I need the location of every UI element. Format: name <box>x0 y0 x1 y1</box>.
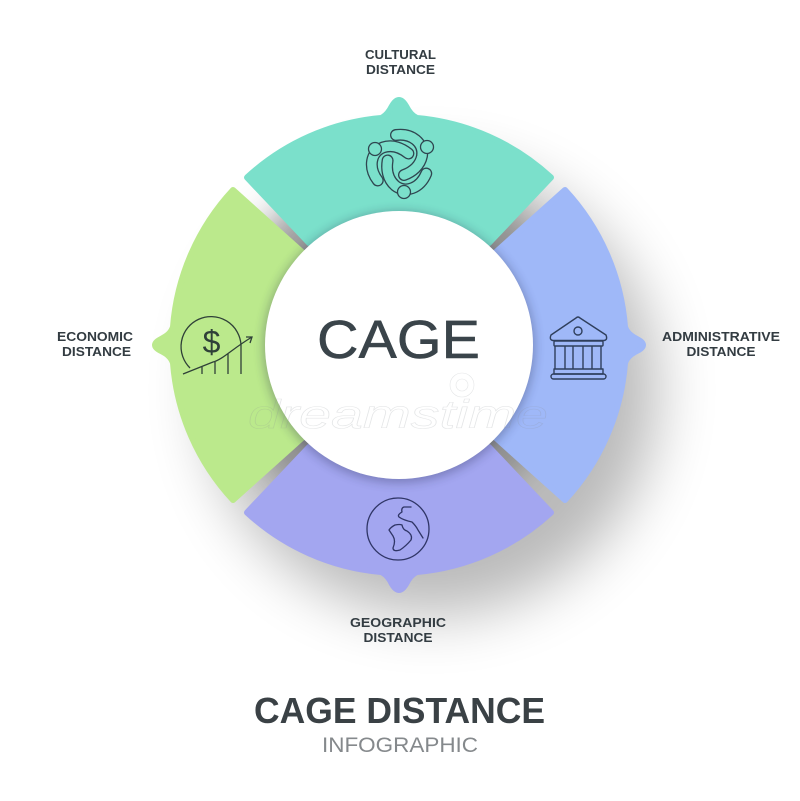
icon: globe <box>367 498 429 560</box>
drop shadow of ring <box>207 165 657 615</box>
center circle <box>265 211 533 479</box>
label: cultural distance: CULTURAL <box>365 47 436 62</box>
title: CAGE DISTANCE <box>254 690 545 731</box>
label: cultural distance <box>365 47 436 77</box>
label: economic distance: DISTANCE <box>62 344 131 359</box>
icon: dollar growth chart: $ <box>203 324 221 360</box>
gap shadow between segments <box>224 170 574 520</box>
icon: people circle <box>364 135 434 198</box>
center word: CAGE <box>317 310 480 370</box>
watermark <box>248 373 548 437</box>
label: administrative distance <box>662 329 780 359</box>
panel: geographic segment <box>247 447 551 590</box>
label: administrative distance: DISTANCE <box>686 344 756 359</box>
panel: cultural segment <box>247 100 551 243</box>
label: geographic distance: GEOGRAPHIC <box>350 615 447 630</box>
ring diagram <box>155 100 643 590</box>
label: geographic distance: DISTANCE <box>364 630 433 645</box>
icon: dollar growth chart <box>181 317 252 374</box>
label: cultural distance: DISTANCE <box>366 62 435 77</box>
subtitle: INFOGRAPHIC <box>322 734 478 757</box>
inner circle shadow <box>263 211 535 483</box>
watermark: dreamstime <box>248 393 548 437</box>
label: economic distance: ECONOMIC <box>57 329 134 344</box>
panel: administrative segment <box>496 190 643 500</box>
label: economic distance <box>57 329 134 359</box>
label: administrative distance: ADMINISTRATIVE <box>662 329 780 344</box>
panel: economic segment <box>155 190 302 500</box>
icon: bank building <box>550 317 607 379</box>
label: geographic distance <box>350 615 447 645</box>
